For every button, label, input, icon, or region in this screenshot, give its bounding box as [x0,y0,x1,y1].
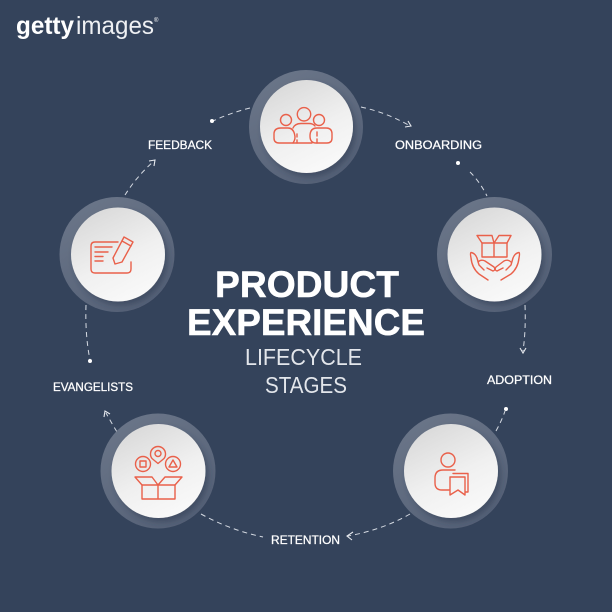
logo: gettyimages: getty [16,12,74,40]
logo: gettyimages [16,12,159,40]
label: evangelists: EVANGELISTS [53,382,133,394]
circle: bottom left, box with shapes icon [100,414,216,528]
label: retention: RETENTION [271,535,340,547]
label: feedback: FEEDBACK [148,140,212,152]
title [187,264,425,398]
title: PRODUCT [215,264,399,305]
icon: note and pencil [91,237,133,273]
logo: gettyimages: images [76,12,154,40]
circle: top, people icon [249,70,363,184]
arrow: feedback to top circle [210,108,250,123]
icon: hands holding box [470,236,520,280]
arrow: top circle to onboarding [361,107,411,127]
arrow: right circle to adoption [520,305,526,353]
arrow: left circle to feedback [125,160,155,195]
arrow: bottom right circle to retention [347,514,410,540]
arrow: evangelists to left circle [86,305,92,363]
icon: open box with shapes [135,447,182,499]
label: adoption: ADOPTION [487,375,552,387]
title: LIFECYCLE [245,344,362,370]
logo: gettyimages: ® [154,17,159,24]
arrow: bottom left circle to retention [201,514,263,537]
icon: person with bookmark [435,453,468,495]
circle: right, hands and box icon [437,197,552,312]
title: STAGES [265,372,347,398]
arrow: adoption to bottom right circle [496,407,508,431]
title: EXPERIENCE [187,302,425,343]
circle: left, pencil icon [60,197,174,312]
label: onboarding: ONBOARDING [395,140,482,152]
icon: group of people [274,108,332,143]
arrow: bottom left circle to evangelists [104,411,117,432]
circle: bottom right, user and bookmark icon [393,414,508,528]
arrow: onboarding to right circle [456,161,487,196]
